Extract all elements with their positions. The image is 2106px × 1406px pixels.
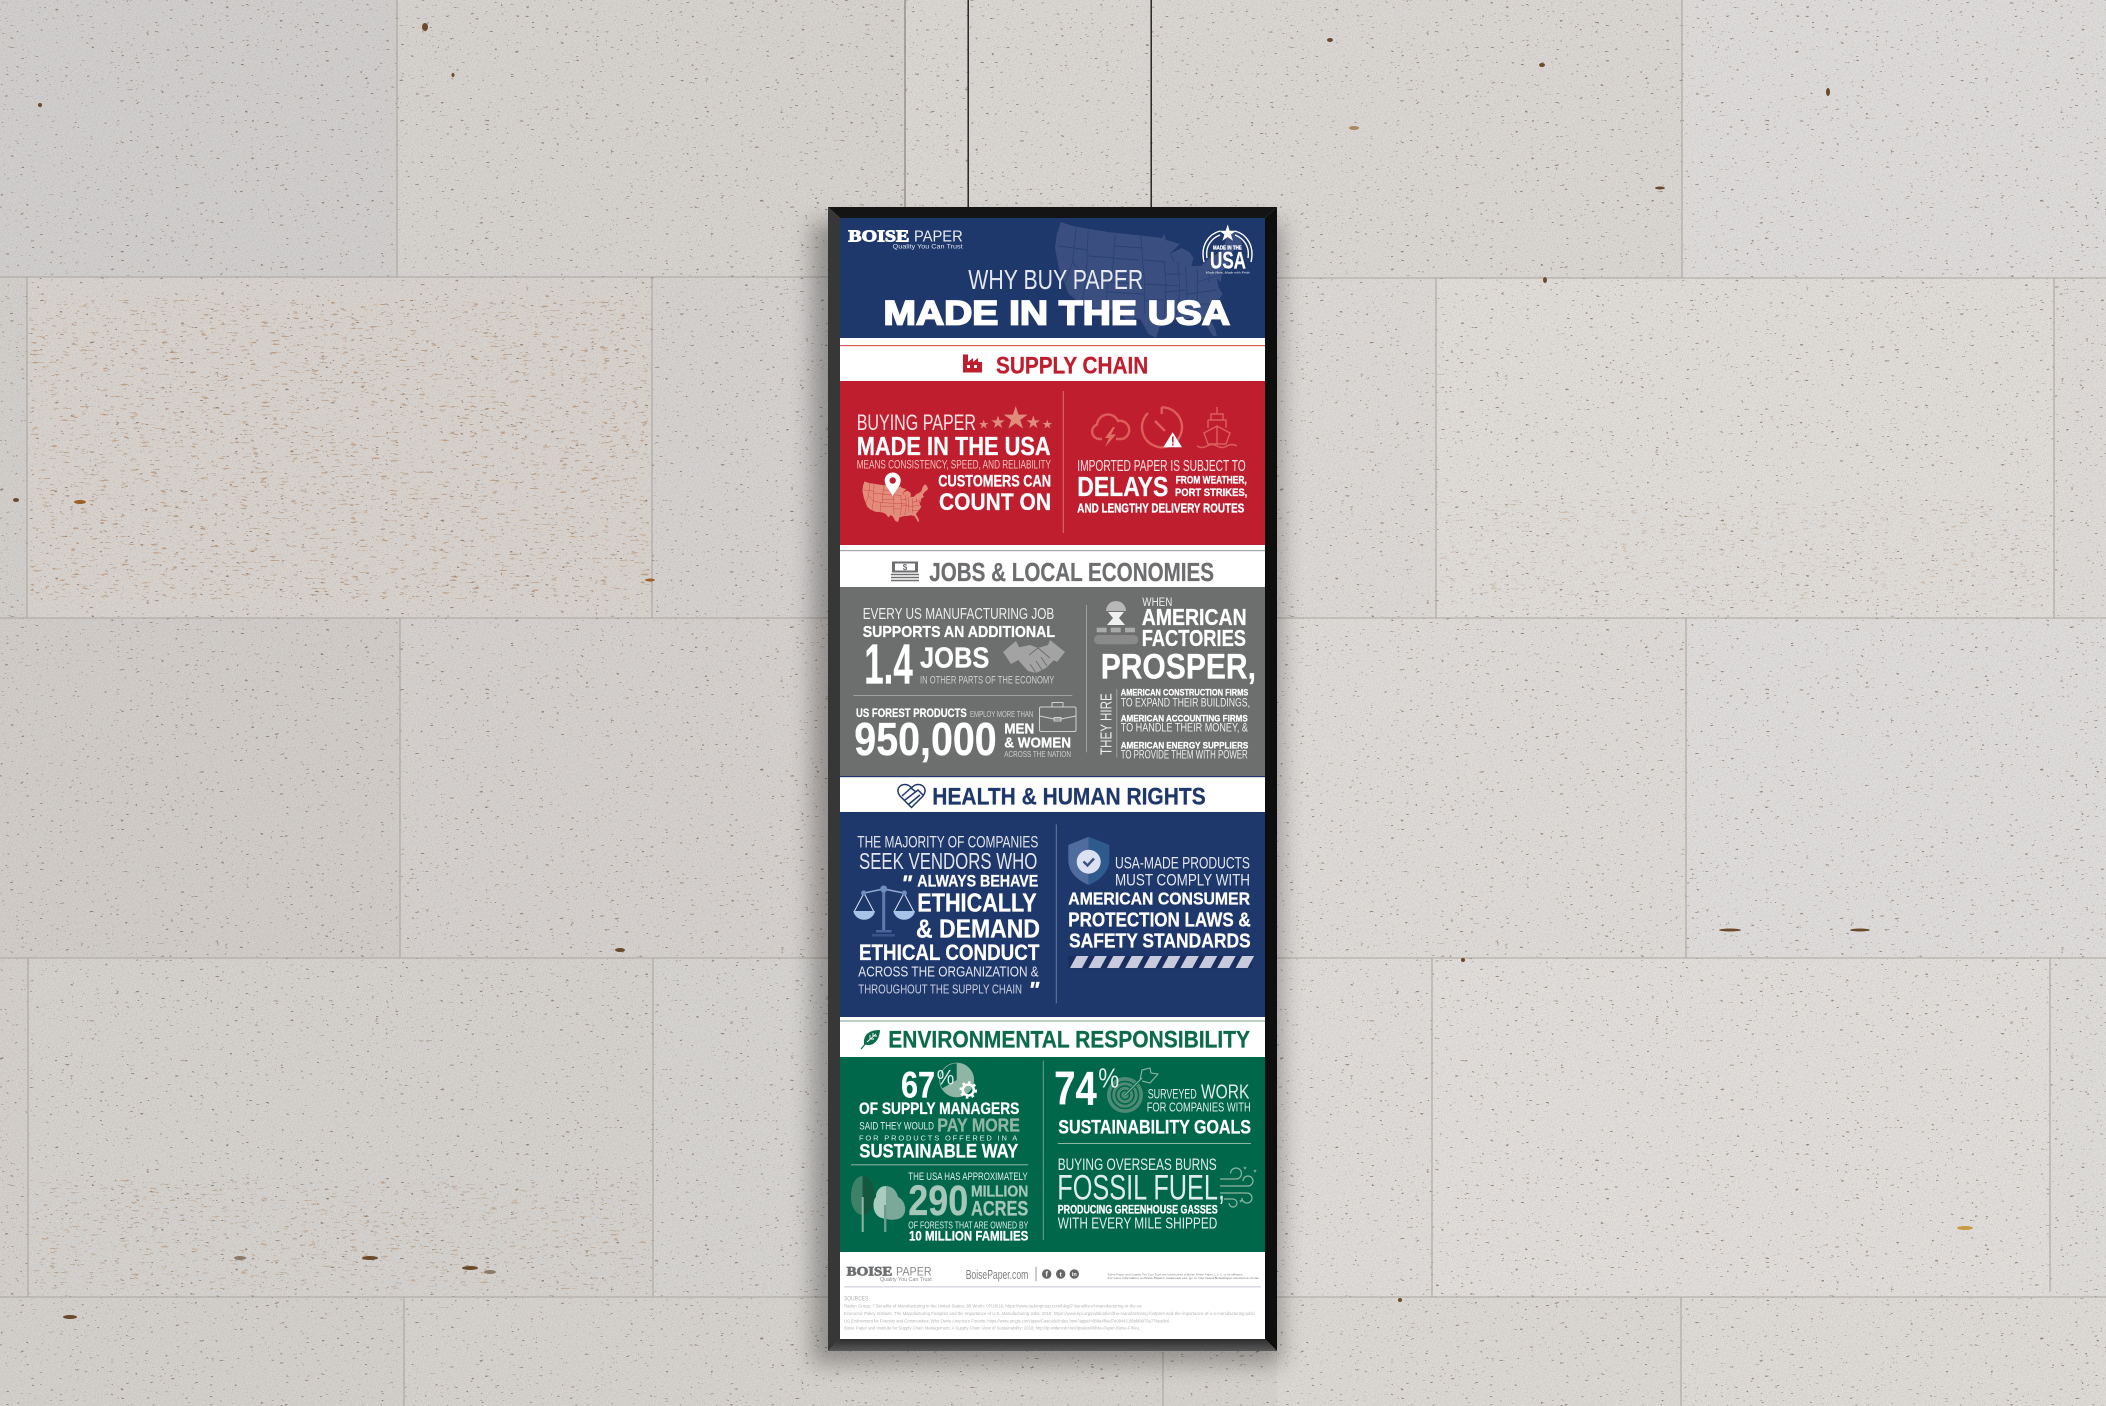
text: list of American firms: TO PROVIDE THEM WITH POWER bbox=[1121, 749, 1248, 761]
stat: 290 million acres: MILLION bbox=[971, 1184, 1028, 1201]
stat: 290 million acres: THE USA HAS APPROXIMATELY bbox=[908, 1171, 1028, 1183]
panel: health heading bbox=[840, 776, 1265, 810]
hazard stripe bar bbox=[1068, 956, 1254, 968]
icon: leaf bbox=[861, 1030, 880, 1049]
text: ethical vendors quote: ETHICAL CONDUCT bbox=[859, 940, 1040, 965]
sources list: SOURCES bbox=[844, 1296, 868, 1302]
text: 950,000 men and women: ACROSS THE NATION bbox=[1004, 750, 1071, 759]
icon: stack of money: $ bbox=[903, 563, 908, 572]
text: buying paper made in the USA bbox=[857, 410, 1051, 471]
stat: 74 percent: WORK bbox=[1201, 1081, 1250, 1103]
icon: cargo ship bbox=[1197, 407, 1237, 448]
text: fossil fuel: WITH EVERY MILE SHIPPED bbox=[1058, 1215, 1217, 1232]
text: when American factories prosper bbox=[1101, 597, 1256, 686]
text: consumer protection: PROTECTION LAWS & bbox=[1068, 910, 1251, 932]
text: ethical vendors quote: ETHICALLY bbox=[917, 890, 1037, 918]
sources list: Economic Policy Institute; The Manufacturing Footprint and the Importance of U.S. Manufacturing Jobs; 2015; https://www.epi.org/publication/the-manufacturing-footprint-and-the-importance-of-u-s-manufacturing-jobs/ bbox=[844, 1311, 1256, 1316]
text: imported paper delays: IMPORTED PAPER IS SUBJECT TO bbox=[1077, 458, 1246, 475]
text: 1.4 jobs: IN OTHER PARTS OF THE ECONOMY bbox=[920, 674, 1055, 686]
text: when American factories prosper: PROSPER, bbox=[1101, 647, 1256, 686]
stat: 290 million acres bbox=[908, 1171, 1028, 1244]
Boise Paper logo: PAPER bbox=[914, 229, 963, 246]
text: ethical vendors quote: ACROSS THE ORGANIZATION & bbox=[858, 964, 1039, 981]
icon: handshake bbox=[1003, 640, 1065, 673]
text: imported paper delays: DELAYS bbox=[1077, 471, 1168, 502]
stat: 67 percent: OF SUPPLY MANAGERS bbox=[859, 1100, 1019, 1118]
text: customers can count on bbox=[938, 473, 1051, 516]
text: ethical vendors quote: THE MAJORITY OF COMPANIES bbox=[857, 834, 1038, 852]
text: when American factories prosper: FACTORIES bbox=[1142, 625, 1246, 651]
text: consumer protection: AMERICAN CONSUMER bbox=[1068, 888, 1250, 908]
Boise Paper footer logo: BOISE bbox=[847, 1265, 892, 1279]
hanging wires bbox=[968, 0, 1152, 208]
text: fossil fuel: BUYING OVERSEAS BURNS bbox=[1058, 1156, 1217, 1174]
icon: five stars bbox=[979, 406, 1052, 429]
Boise Paper logo bbox=[848, 227, 963, 251]
text: 950,000 men and women: & WOMEN bbox=[1004, 735, 1071, 752]
icon: trees bbox=[851, 1176, 905, 1232]
stat: 67 percent: SAID THEY WOULD bbox=[859, 1120, 934, 1132]
text: fossil fuel: PRODUCING GREENHOUSE GASSES bbox=[1058, 1204, 1218, 1216]
text: customers can count on: COUNT ON bbox=[939, 489, 1051, 516]
icon: wind bbox=[1220, 1166, 1257, 1207]
Boise Paper footer logo bbox=[847, 1265, 932, 1283]
text: when American factories prosper: WHEN bbox=[1142, 597, 1172, 609]
text: ethical vendors quote: ALWAYS BEHAVE bbox=[917, 873, 1038, 891]
title: MADE IN THE USA bbox=[884, 294, 1230, 332]
social icons: f bbox=[1046, 1272, 1049, 1279]
icon: shield with check bbox=[1068, 837, 1109, 885]
stat: 67 percent: FOR PRODUCTS OFFERED IN A bbox=[859, 1133, 1017, 1142]
panel: footer bbox=[844, 1265, 1261, 1331]
stat: 74 percent bbox=[1054, 1061, 1251, 1138]
stat: 74 percent: SUSTAINABILITY GOALS bbox=[1058, 1116, 1251, 1138]
stat: 67 percent: 67 bbox=[901, 1064, 935, 1105]
stat: 74 percent: 74 bbox=[1054, 1061, 1097, 1114]
icon: factory bbox=[963, 354, 982, 372]
text: imported paper delays bbox=[1077, 458, 1247, 515]
text: list of American firms: AMERICAN ACCOUNTING FIRMS bbox=[1121, 713, 1248, 724]
text: ethical vendors quote: THROUGHOUT THE SUPPLY CHAIN bbox=[858, 981, 1022, 996]
icon: scales of justice bbox=[853, 886, 915, 937]
text: when American factories prosper: AMERICAN bbox=[1142, 604, 1247, 630]
panel: health and human rights bbox=[840, 812, 1265, 1017]
Made in the USA badge: MADE IN THE bbox=[1213, 245, 1242, 251]
poster frame bbox=[828, 207, 1277, 1351]
sources list: Radon Group; 7 Benefits of Manufacturing in the United States; Jill Worth; 07/28/18; https://www.radongroup.com/blog/7-benefits-of-manufacturing-in-the-us bbox=[844, 1304, 1142, 1309]
Boise Paper footer logo: Quality You Can Trust bbox=[880, 1277, 932, 1283]
text: list of American firms: TO EXPAND THEIR BUILDINGS, bbox=[1121, 698, 1250, 710]
text: customers can count on: CUSTOMERS CAN bbox=[938, 473, 1051, 491]
text: ethical vendors quote: SEEK VENDORS WHO bbox=[859, 848, 1037, 874]
text: 950,000 men and women: EMPLOY MORE THAN bbox=[970, 710, 1033, 719]
Boise Paper footer logo: PAPER bbox=[896, 1265, 932, 1279]
text: list of American firms: AMERICAN ENERGY SUPPLIERS bbox=[1121, 740, 1248, 751]
heading text: SUPPLY CHAIN bbox=[996, 352, 1148, 379]
text: 1.4 jobs: JOBS bbox=[920, 642, 989, 674]
panel: supply chain bbox=[840, 381, 1265, 545]
text: ethical vendors quote: & DEMAND bbox=[916, 916, 1040, 944]
Boise Paper logo: BOISE bbox=[848, 227, 909, 246]
stat: 74 percent: SURVEYED bbox=[1148, 1086, 1197, 1101]
text: buying paper made in the USA: MADE IN THE USA bbox=[857, 433, 1051, 461]
social icons bbox=[1042, 1269, 1079, 1279]
stat: 67 percent: SUSTAINABLE WAY bbox=[859, 1141, 1018, 1163]
icon: US map with pin bbox=[862, 472, 928, 522]
panel: environmental heading bbox=[840, 1020, 1265, 1053]
stat: 290 million acres: 10 MILLION FAMILIES bbox=[909, 1228, 1028, 1244]
stat: 290 million acres: ACRES bbox=[971, 1198, 1028, 1221]
panel: supply chain heading bbox=[840, 345, 1265, 379]
Made in the USA badge: Made Here, Made with Pride bbox=[1205, 271, 1250, 276]
stat: 67 percent bbox=[859, 1064, 1020, 1163]
text: buying paper made in the USA: BUYING PAPER bbox=[857, 410, 976, 435]
text: imported paper delays: AND LENGTHY DELIVERY ROUTES bbox=[1077, 501, 1244, 515]
panel: jobs heading bbox=[840, 550, 1265, 587]
heading text: ENVIRONMENTAL RESPONSIBILITY bbox=[888, 1026, 1250, 1053]
stat: 290 million acres: 290 bbox=[908, 1177, 968, 1225]
text: consumer protection bbox=[1068, 853, 1251, 953]
text: they hire: THEY HIRE bbox=[1099, 693, 1116, 755]
text: buying paper made in the USA: MEANS CONSISTENCY, SPEED, AND RELIABILITY bbox=[857, 459, 1051, 471]
panel: header bbox=[840, 218, 1265, 338]
text: 1.4 jobs: EVERY US MANUFACTURING JOB bbox=[863, 606, 1054, 623]
text: consumer protection: MUST COMPLY WITH bbox=[1115, 871, 1250, 890]
text: 950,000 men and women: US FOREST PRODUCTS bbox=[856, 706, 967, 720]
icon: storm cloud bbox=[1092, 414, 1129, 447]
text: list of American firms bbox=[1121, 688, 1250, 761]
poster drop shadow bbox=[812, 222, 1282, 1364]
panel: jobs and local economies bbox=[840, 587, 1265, 776]
title: WHY BUY PAPER bbox=[968, 264, 1143, 295]
sources list bbox=[844, 1296, 1256, 1331]
text: fossil fuel: FOSSIL FUEL, bbox=[1057, 1168, 1225, 1207]
US map watermark bbox=[1055, 222, 1242, 338]
text: 950,000 men and women bbox=[854, 706, 1071, 765]
Made in the USA badge bbox=[1203, 224, 1252, 276]
text: fossil fuel bbox=[1057, 1156, 1225, 1232]
title bbox=[884, 264, 1230, 332]
text: ethical vendors quote: " bbox=[901, 871, 913, 896]
text: ethical vendors quote: " bbox=[1028, 978, 1040, 1002]
icon: clock with warning bbox=[1142, 407, 1182, 447]
text: list of American firms: TO HANDLE THEIR MONEY, & bbox=[1121, 723, 1248, 735]
social icons: t bbox=[1060, 1271, 1063, 1278]
panel: environmental responsibility bbox=[840, 1057, 1265, 1252]
text: 950,000 men and women: 950,000 bbox=[854, 713, 997, 765]
sources list: Boise Paper and Institute for Supply Chain Management; A Supply Chain View of Sustainability; 2018; http://ip.widencdn.net/ipsales/White-Paper-Boise-FINAL bbox=[844, 1326, 1141, 1331]
icon: briefcase bbox=[1040, 702, 1076, 732]
social icons: in bbox=[1072, 1272, 1077, 1278]
Made in the USA badge: USA bbox=[1210, 247, 1246, 274]
icon: target with arrow bbox=[1107, 1068, 1158, 1113]
text: ethical vendors quote bbox=[857, 834, 1040, 1002]
text: imported paper delays: PORT STRIKES, bbox=[1175, 487, 1247, 499]
stat: 67 percent: PAY MORE bbox=[937, 1115, 1020, 1136]
icon: stack of money bbox=[891, 562, 919, 580]
text: list of American firms: AMERICAN CONSTRUCTION FIRMS bbox=[1121, 688, 1248, 699]
stat: 74 percent: % bbox=[1098, 1063, 1119, 1094]
icon: factory worker on conveyor bbox=[1094, 601, 1138, 644]
trademark note: For more information on Boise Paper's trademark use, go to: http://www.BoisePaper.com/terms-of-use. bbox=[1108, 1276, 1260, 1280]
text: 1.4 jobs: SUPPORTS AN ADDITIONAL bbox=[863, 624, 1055, 641]
trademark note bbox=[1108, 1272, 1260, 1280]
text: 1.4 jobs: 1.4 bbox=[864, 632, 913, 696]
text: consumer protection: USA-MADE PRODUCTS bbox=[1115, 853, 1250, 872]
text: consumer protection: SAFETY STANDARDS bbox=[1069, 931, 1251, 953]
stat: 74 percent: FOR COMPANIES WITH bbox=[1147, 1100, 1251, 1115]
trademark note: Boise Paper and Quality You Can Trust are trademarks of Boise White Paper, L.L.C. or its affiliates. bbox=[1108, 1272, 1244, 1276]
text: 1.4 jobs bbox=[863, 606, 1055, 696]
text: imported paper delays: FROM WEATHER, bbox=[1176, 474, 1247, 486]
icon: heart handshake bbox=[898, 784, 925, 808]
Boise Paper logo: Quality You Can Trust bbox=[893, 244, 963, 251]
icon: pie chart with gear bbox=[940, 1063, 976, 1098]
text: 950,000 men and women: MEN bbox=[1004, 720, 1034, 737]
sources list: US Endowment for Forestry and Communities; Who Owns America's Forests; https://www.arcgis.com/apps/Cascade/index.html?appid=d88a4f6ed7e094421f8bfd8973a77bea8e6 bbox=[844, 1318, 1170, 1323]
stat: 290 million acres: OF FORESTS THAT ARE OWNED BY bbox=[908, 1219, 1028, 1231]
website: BoisePaper.com bbox=[966, 1267, 1028, 1282]
stat: 67 percent: % bbox=[937, 1066, 954, 1089]
heading text: JOBS & LOCAL ECONOMIES bbox=[929, 559, 1214, 587]
heading text: HEALTH & HUMAN RIGHTS bbox=[932, 783, 1206, 810]
